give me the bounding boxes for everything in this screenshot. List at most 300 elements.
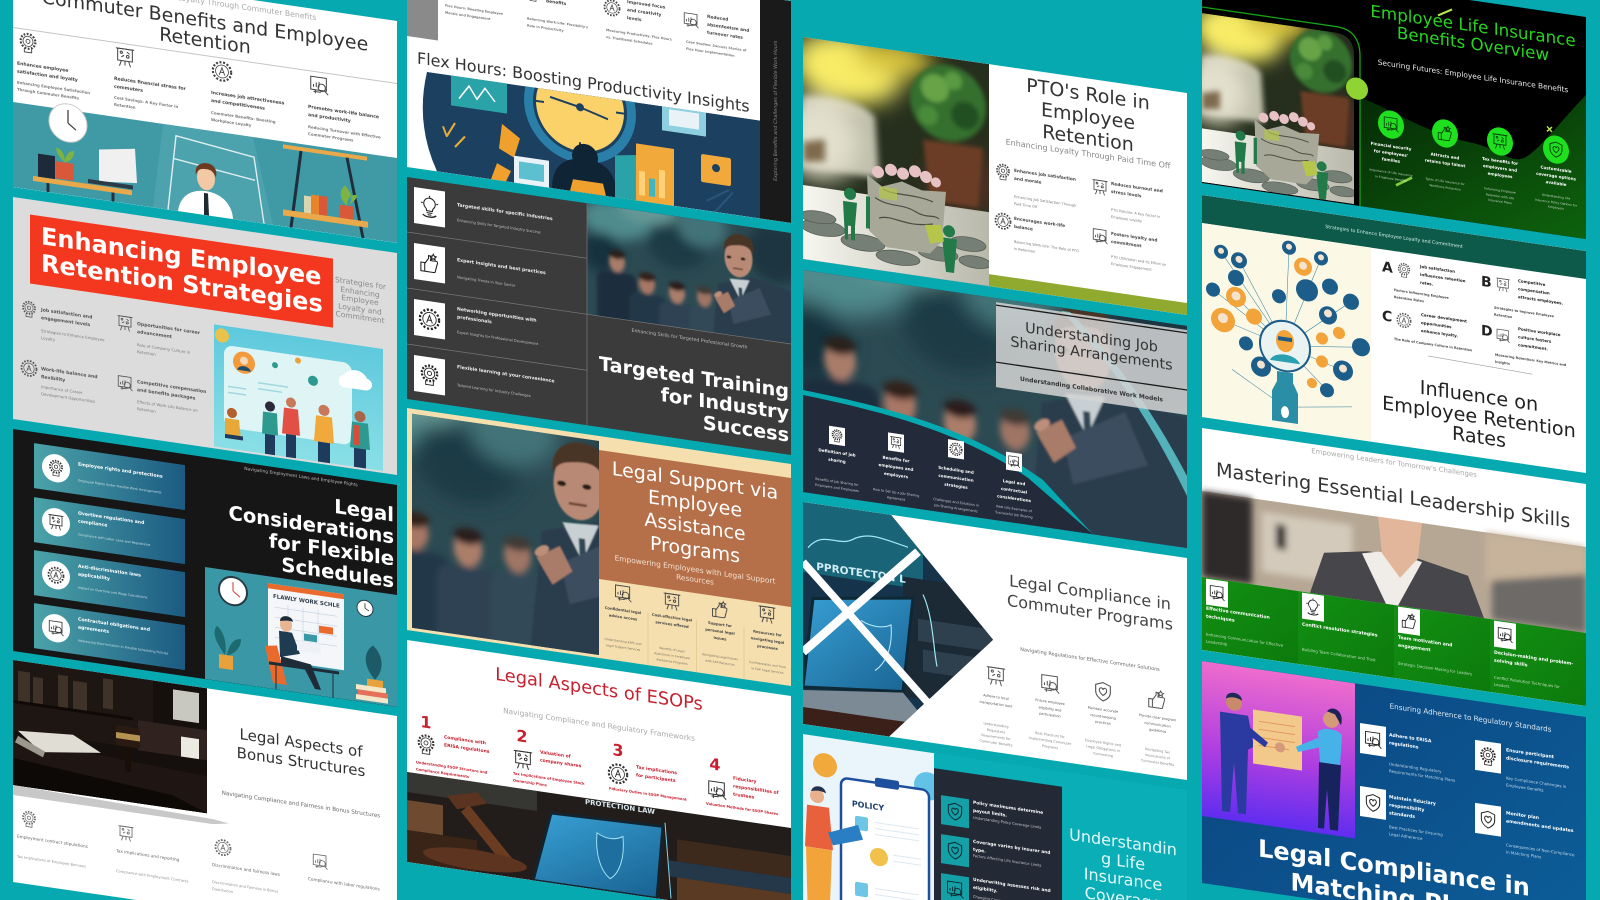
title (996, 316, 1187, 376)
item: scheduling: Challenges and Solutions in (933, 497, 979, 508)
item A: Factors Influencing Employee (1394, 288, 1449, 300)
item 2 (510, 725, 602, 798)
title: Programs (650, 532, 740, 568)
item: scheduling: strategies (944, 482, 968, 490)
item: satisfaction: satisfaction and loyalty (17, 70, 78, 83)
item: transportation laws (970, 660, 1022, 752)
row: contractual: Contractual obligations and (78, 617, 150, 633)
icon tile (1475, 803, 1501, 837)
icon tile: thumb (414, 243, 445, 284)
item: ERISA: Understanding Regulatory (1389, 761, 1441, 774)
column: decision-making: Conflict Resolution Techniques for (1494, 675, 1560, 689)
item: legal: considerations (997, 493, 1031, 503)
icon: gear in circle (42, 559, 70, 591)
row: contractual (34, 603, 185, 670)
title: g Life (1101, 848, 1145, 873)
subtitle: Commitment (335, 309, 385, 326)
item: job satisfaction: Job satisfaction and (41, 308, 92, 321)
item: resources (744, 601, 791, 684)
icon tile (1302, 593, 1324, 622)
item: amendments: Monitor plan (1506, 811, 1539, 821)
item C: C (1382, 308, 1392, 326)
panel: understanding life insurance coverage (803, 734, 1187, 900)
item: work-life: Balancing Work-Life: Flexibility's (527, 17, 588, 29)
panel: commuter benefits and employee retention (13, 0, 397, 243)
item: focus: and creativity (627, 8, 661, 18)
icon: barrier (985, 664, 1007, 689)
item: attracts talent: Attracts and (1431, 151, 1459, 161)
title: Employee Life Insurance (1370, 1, 1576, 51)
icon: board (662, 590, 682, 613)
icon: board (118, 315, 132, 332)
column: decision-making: solving skills (1494, 659, 1527, 668)
column: conflict: Conflict resolution strategies (1302, 623, 1378, 639)
item: guidelines: Navigating Tax (1145, 747, 1170, 755)
icon: factory (1039, 671, 1061, 697)
icon tile (1360, 723, 1386, 757)
item: fiduciary (1360, 786, 1470, 854)
icon: chart (684, 12, 699, 28)
column: decision-making (1490, 619, 1586, 706)
subtitle: Navigating Employment Laws and Employee Rights (244, 467, 358, 488)
column: motivation: engagement (1398, 644, 1431, 653)
item: fiduciary: Maintain fiduciary (1389, 795, 1436, 807)
icon: growth chart (706, 778, 728, 803)
item: focus: Measuring Productivity: Flex Hours (606, 28, 672, 42)
item: financial security: for employees' (1374, 148, 1408, 158)
row: contractual: agreements (78, 625, 109, 635)
row: overtime: Overtime regulations and (78, 511, 144, 526)
row: overtime: Compliance with Labor Laws and Regulations (78, 532, 150, 547)
item: record-keeping: Commuting (1093, 751, 1113, 758)
photo: laptop in diamond mask (803, 502, 993, 748)
title box: Retention Strategies (41, 249, 323, 318)
item: customizable: Employers (1548, 204, 1564, 211)
item: job satisfaction: Enhancing Job Satisfaction Through (1014, 195, 1076, 208)
item: loyalty: PTO Utilization and Its Effect on (1111, 255, 1166, 267)
column: communication: Effective communication (1206, 607, 1270, 621)
icon: board (512, 747, 534, 773)
item: record-keeping: Legal Obligations in (1086, 744, 1120, 753)
icon: gear head (994, 162, 1012, 182)
item: cost-effective: Assistance in Employee (654, 651, 690, 660)
item B: compensation (1518, 286, 1550, 296)
row: employee rights (34, 443, 185, 510)
subtitle: Ensuring Adherence to Regulatory Standards (1390, 701, 1551, 734)
title: Legal Aspects of (240, 725, 362, 761)
item: amendments: amendments and updates (1506, 819, 1574, 834)
item: personal issues: issues (714, 636, 726, 642)
item: definition (811, 421, 863, 495)
row: policy maximums: payout limits. (973, 809, 1007, 819)
item: job satisfaction: Enhances job satisfaction (1014, 169, 1076, 183)
item: burnout: stress levels (1111, 190, 1141, 199)
item: guidelines: communication (1144, 720, 1171, 728)
item: employment contract: Tax Implications of Employee Bonuses (17, 855, 86, 869)
item: employment contract (17, 810, 88, 869)
item: attracts talent (1418, 115, 1472, 200)
illustration: woman with policy clipboard (803, 734, 1187, 900)
item: absenteeism: turnover rates (707, 31, 743, 41)
subtitle: Empowering Employees with Legal Support (615, 553, 775, 586)
icon: case (1092, 679, 1114, 704)
icon tile (1398, 607, 1420, 636)
column: communication: techniques (1206, 615, 1235, 624)
item: record-keeping (1077, 676, 1129, 768)
title: Benefits Overview (1397, 22, 1549, 65)
item: work-life (993, 210, 1089, 274)
item: transportation laws: Regulatory (987, 728, 1005, 734)
item: fiduciary: standards (1389, 811, 1415, 820)
item: tax benefits: Retention with Life (1486, 192, 1514, 200)
item: legal: Legal and (1003, 478, 1025, 486)
item: discrimination: Discrimination and fairness laws (212, 862, 280, 877)
item A: influences retention (1420, 272, 1466, 283)
row: insights: Navigating Trends in Your Sector (457, 275, 515, 288)
row: insights: Expert insights and best practices (457, 258, 546, 276)
icon: hands (1146, 687, 1168, 712)
row: anti-discrimination: applicability (78, 572, 110, 582)
band caption: Strategies to Enhance Employee Loyalty and Commitment (1325, 225, 1463, 250)
photo: coins and paper people (803, 37, 1187, 315)
column: conflict: Building Team Collaboration and Trust (1302, 647, 1376, 662)
item: fiduciary: Best Practices for Ensuring (1389, 824, 1443, 837)
title: Legal Support via (612, 458, 778, 504)
item 3: for participants (636, 773, 676, 784)
title (993, 569, 1187, 637)
item: amendments (1475, 803, 1585, 871)
title: Insurance (1084, 864, 1162, 894)
item B: Competitive (1518, 278, 1545, 287)
title: Employee (1041, 99, 1135, 134)
title (237, 725, 365, 780)
title: Employee (648, 486, 742, 522)
row: anti-discrimination (34, 550, 185, 617)
item: eligibility: Ensure employee (1035, 698, 1065, 706)
item: definition: sharing (828, 457, 846, 464)
item 1: Compliance Requirements (416, 767, 469, 779)
item 2: Valuation of (540, 750, 571, 760)
vertical caption: Exploring Benefits and Challenges of Flexible Work Hours (773, 40, 779, 181)
item: compensation: and benefits packages (137, 388, 195, 402)
title box (30, 214, 333, 328)
title: Legal Aspects of ESOPs (495, 664, 703, 715)
item: financial security: Importance of Life Insurance (1369, 167, 1413, 178)
icon tile (1006, 452, 1022, 472)
header band and network illustration (1202, 195, 1586, 473)
title (1202, 826, 1586, 900)
icon: gear (212, 61, 232, 82)
photo: laptop in diamond mask: PPROTECTON L (816, 561, 906, 586)
title (1063, 825, 1183, 900)
item: attracts talent: Types of Life Insurance for (1425, 177, 1465, 186)
panel: understanding job sharing (803, 270, 1187, 548)
item: career advancement: advancement (137, 330, 172, 340)
item: job satisfaction: Paid Time Off (1014, 202, 1037, 209)
item: guidelines: Commuter Benefits (1141, 758, 1174, 767)
title (599, 456, 791, 576)
item: employment contract: Employment contract stipulations (17, 834, 88, 849)
item: job satisfaction: and morale (1014, 177, 1041, 186)
item: burnout: PTO Policies: A Key Factor in (1111, 208, 1160, 219)
item: ERISA: Requirements for Matching Plans (1389, 768, 1455, 783)
item: attractiveness: and competitiveness (211, 99, 265, 112)
item: balance: Promotes work-life balance (308, 105, 379, 120)
item: definition: Definition of job (818, 447, 856, 458)
row: anti-discrimination: Anti-discrimination laws (78, 564, 141, 579)
item: loyalty: Employee Engagement (1111, 262, 1152, 272)
item 2: Tax Implications of Employee Stock (513, 771, 585, 786)
item 4: 4 (709, 754, 721, 775)
title (1372, 371, 1586, 464)
item 4: trustees (733, 793, 754, 801)
photo and brown block (407, 408, 791, 686)
subtitle: Empowering Leaders for Tomorrow's Challenges (1311, 447, 1477, 479)
photo: gavel and glowing laptop: PROTECTION LAW (585, 797, 655, 816)
photo: gavel and glowing laptop (407, 640, 791, 900)
item: attractiveness: Workplace Loyalty (211, 117, 251, 128)
item: legal: Successful Job Sharing (995, 510, 1033, 519)
icon: board in circle (42, 506, 70, 538)
subtitle: Strategies for (335, 275, 386, 291)
item A (1382, 257, 1478, 319)
item: attractiveness (211, 61, 284, 128)
item: customizable: Understanding Life (1542, 193, 1570, 201)
photo: gavel on desk in laptop (13, 660, 228, 824)
item: job satisfaction (993, 160, 1089, 224)
item: transportation laws: Understanding (984, 721, 1008, 729)
item: work-life (527, 0, 588, 33)
item: career advancement: Retention (137, 349, 156, 357)
item: scheduling: communication (938, 473, 974, 483)
icon tile: bulb (414, 187, 445, 228)
item: ERISA: regulations (1389, 741, 1419, 751)
icon: board (1091, 177, 1109, 198)
title: Mastering Essential Leadership Skills (1216, 458, 1570, 533)
item: loyalty (1089, 224, 1185, 288)
subtitle: Employee (341, 293, 379, 308)
row: coverage varies (941, 834, 1061, 882)
column: decision-making: Decision-making and problem- (1494, 651, 1573, 667)
illustration: handshake over document (1202, 661, 1586, 900)
item: disclosure: Key Compliance Challenges in (1506, 775, 1566, 789)
item C: Career development (1421, 312, 1467, 324)
row: policy maximums (941, 795, 1061, 843)
item: financial security: families (1382, 156, 1400, 164)
item: customizable: Customizable (1540, 164, 1572, 174)
icon: gear head (20, 32, 36, 54)
icon: green circle (1543, 134, 1569, 166)
item: record-keeping: Maintain accurate (1088, 706, 1118, 714)
subtitle: Resources (676, 572, 714, 587)
item 1: 1 (420, 712, 432, 733)
icon: green circle (1378, 109, 1404, 140)
item: absenteeism (684, 12, 750, 58)
item: advice: Legal Support Services (606, 643, 640, 652)
subtitle: Understanding Collaborative Work Models (1020, 376, 1163, 404)
column: conflict (1298, 591, 1394, 678)
subtitle: Navigating Compliance and Regulatory Frameworks (503, 706, 695, 743)
item A: Job satisfaction (1420, 264, 1455, 274)
item: benefits: How to Set Up a Job Sharing (873, 487, 919, 498)
item: tax benefits: Enhancing Employee (1484, 186, 1516, 195)
item A: rates. (1420, 280, 1433, 287)
title: Understanding Job (1025, 320, 1158, 356)
item D: D (1481, 323, 1493, 340)
title: Legal (334, 495, 394, 527)
title: Targeted Training (599, 352, 789, 403)
item: transportation laws: Adhere to local (983, 693, 1009, 701)
item: financial stress: commuters (114, 85, 143, 94)
item: burnout: Employee Loyalty (1111, 215, 1142, 223)
icon tile: shield (941, 795, 969, 828)
illustration: woman with policy clipboard: POLICY (852, 799, 884, 813)
row: insights (407, 233, 587, 315)
title (589, 352, 789, 447)
title: Legal Compliance in (1009, 571, 1171, 614)
column: communication: Leadership (1206, 639, 1227, 647)
item: compensation: Effects of Work-Life Balance on (137, 399, 198, 413)
item: advice: Understanding EAPs and (605, 637, 641, 646)
item: advice: advice access (609, 613, 637, 622)
title: Considerations (228, 501, 394, 549)
item C: The Role of Company Culture in Retention (1394, 337, 1472, 352)
row: networking: professionals (457, 315, 492, 325)
row: underwriting: Underwriting assesses risk and (973, 878, 1051, 894)
icon: chart (1495, 327, 1511, 345)
item C: enhance loyalty. (1421, 328, 1458, 338)
item 3: 3 (612, 740, 624, 761)
item: satisfaction: Enhances employee (17, 62, 68, 74)
item D: Insights (1495, 360, 1510, 366)
item: work-life: Role in Productivity (527, 24, 564, 33)
item: personal issues: Navigating Legal Issues (702, 652, 738, 661)
panel: mastering essential leadership skills (1202, 428, 1586, 706)
subtitle (335, 275, 386, 326)
row: coverage varies: type. (973, 848, 986, 855)
row: coverage varies: Coverage varies by insurer and (973, 840, 1050, 856)
item: focus: levels (627, 16, 641, 23)
item: attracts talent: Workforce Protection (1429, 183, 1461, 191)
icon: gear (604, 0, 620, 16)
item: benefits: employers (884, 471, 908, 479)
item B: Retention (1494, 313, 1512, 319)
item: eligibility: Programs (1042, 744, 1058, 750)
item: satisfaction (17, 32, 90, 101)
item: attractiveness: Increases job attractiveness (211, 91, 284, 107)
item: discrimination: Discrimination and Fairness in Bonus (212, 880, 278, 894)
item: fiduciary: Legal Adherence (1389, 831, 1422, 841)
item: definition: Employers and Employees (815, 482, 859, 493)
item: eligibility: participation (1039, 711, 1061, 719)
item 1 (413, 711, 505, 784)
item: compensation: Competitive compensation (137, 380, 206, 395)
icon: gear head (22, 810, 36, 828)
item: disclosure (1475, 740, 1585, 808)
item: personal issues: personal legal (705, 628, 735, 636)
item: disclosure: Ensure participant (1506, 748, 1554, 760)
title: Employee Retention (1382, 391, 1576, 442)
item: customizable: coverage options (1536, 171, 1576, 182)
item: absenteeism: absenteeism and (707, 23, 749, 34)
item: job satisfaction: Loyalty (41, 335, 55, 342)
icon: chart (118, 375, 133, 392)
item: career advancement: Opportunities for career (137, 322, 200, 336)
item: career advancement: Role of Company Culture in (137, 342, 190, 355)
column: decision-making: Leaders (1494, 682, 1509, 689)
item: scheduling (929, 436, 983, 512)
column: communication: Enhancing Communication for Effective (1206, 632, 1283, 648)
item: work-life: Balancing Work-Life: The Role of PTO (1014, 240, 1079, 253)
subtitle: Navigating Regulations for Effective Commuter Solutions (1020, 647, 1160, 673)
item: resources: Resources for (753, 630, 782, 638)
icon: maze (757, 603, 777, 626)
illustration: clock and office items (407, 0, 791, 223)
row: employee rights: Employee Rights Under Flexible Work Arrangements (78, 478, 162, 495)
subtitle (599, 551, 791, 599)
item: definition: Benefits of Job Sharing for (815, 477, 859, 487)
item: work-life: Work-life balance and (41, 367, 98, 380)
icon: gear (607, 761, 629, 786)
icon: hand with coin (710, 598, 730, 621)
item: benefits: employees and (879, 462, 913, 472)
item: attracts talent: retains top talent (1425, 157, 1465, 168)
item: benefits: Agreement (887, 495, 905, 501)
item: labor: Compliance with labor regulations (308, 876, 380, 891)
item: customizable (1529, 131, 1583, 217)
item: legal (987, 447, 1041, 521)
item: transportation laws: transportation laws (980, 699, 1012, 708)
item B (1480, 272, 1584, 335)
item 3: Fiduciary Duties in ESOP Management (609, 786, 687, 802)
item: cost-effective: Cost-effective legal (652, 613, 692, 623)
photo: team with pointing man (407, 203, 791, 426)
item C (1382, 305, 1478, 359)
item: work-life: in Retention (1014, 247, 1035, 254)
icon tile (1360, 786, 1386, 820)
item: transportation laws: Requirements for (981, 733, 1011, 741)
item: customizable: Insurance Policy Options for (1535, 197, 1577, 207)
panel: legal aspects of bonus structures (13, 660, 397, 900)
item: record-keeping: Employee Rights and (1085, 738, 1121, 747)
icon tile (948, 439, 964, 459)
title: Success (703, 411, 789, 447)
icon tile: shield (941, 834, 969, 867)
row: coverage varies: Factors Affecting Life Insurance Limits (973, 854, 1041, 868)
item: balance: Commuter Programs (308, 131, 353, 143)
icon: gear (20, 360, 38, 377)
item 1: Understanding ESOP Structure and (416, 760, 487, 775)
item: morale: Flex Hours: Boosting Employee (445, 4, 503, 16)
item 2: 2 (516, 726, 528, 747)
item: focus: Improved focus (627, 0, 665, 11)
icon: board (1495, 276, 1511, 294)
icon: gear (214, 839, 232, 856)
title: Sharing Arrangements (1010, 334, 1173, 374)
item: customizable: available (1546, 179, 1566, 187)
icon tile: gear (414, 299, 445, 340)
title (1360, 0, 1586, 69)
icon: gear (1396, 311, 1412, 330)
item 4: responsibilities of (733, 785, 779, 796)
item: work-life: Encourages work-life (1014, 217, 1065, 229)
title: Schedules (281, 553, 394, 593)
subtitle: Loyalty and (338, 301, 382, 317)
item: eligibility (1024, 668, 1076, 760)
item 1: ERISA regulations (444, 743, 489, 755)
title: Bonus Structures (237, 744, 365, 780)
item: personal issues: with EAP Resources (705, 659, 735, 667)
